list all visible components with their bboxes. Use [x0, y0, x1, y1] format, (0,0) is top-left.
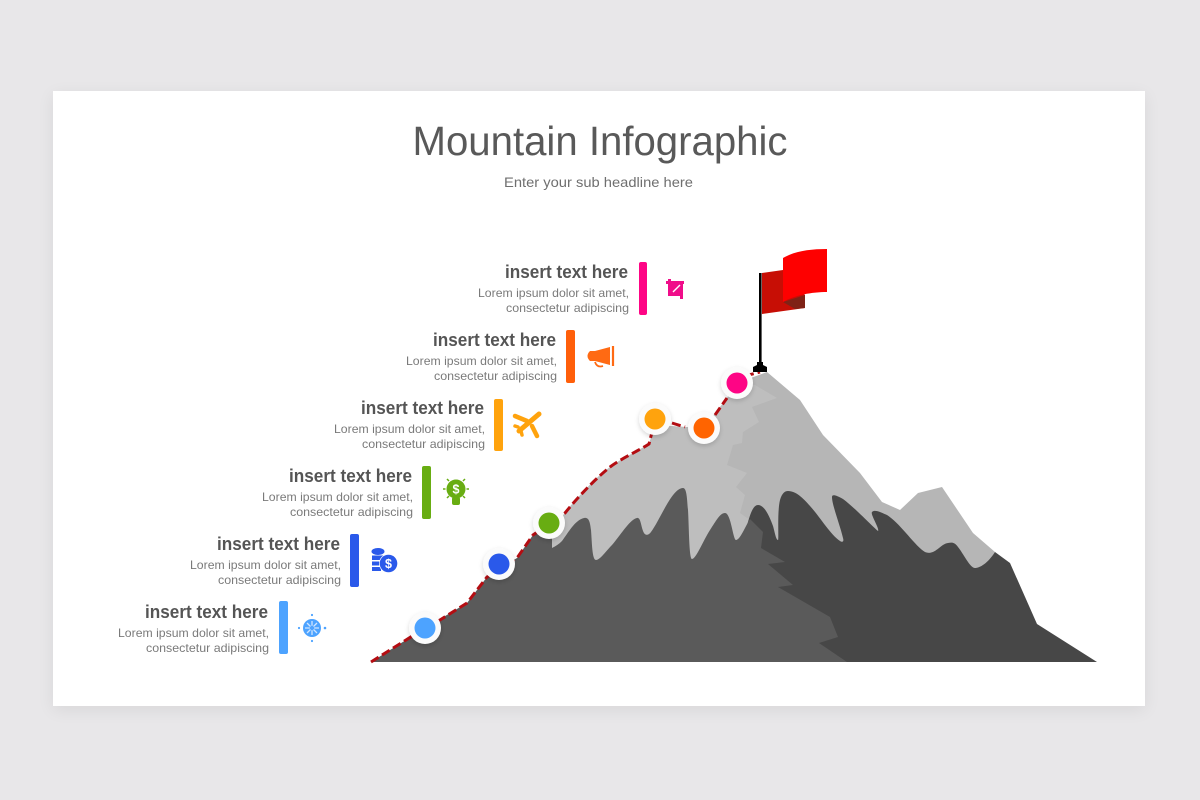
- subtitle: Enter your sub headline here: [504, 174, 693, 190]
- marker: amber: [639, 403, 671, 435]
- item 6: light blue: insert text here: [145, 602, 268, 622]
- item 1: pink: insert text here: [505, 262, 628, 282]
- item 4: green: [262, 466, 469, 519]
- item 5: blue: insert text here: [217, 534, 340, 554]
- icon: crop: [666, 279, 684, 299]
- item 4: green: consectetur adipiscing: [290, 505, 413, 519]
- icon: flag: [753, 249, 827, 372]
- item 2: orange: consectetur adipiscing: [434, 369, 557, 383]
- mountain: front dark face: [371, 488, 847, 662]
- item 3: amber: Lorem ipsum dolor sit amet,: [334, 422, 485, 436]
- item 6: light blue: consectetur adipiscing: [146, 641, 269, 655]
- mountain: dark right face: [700, 491, 1097, 662]
- item 2: orange: Lorem ipsum dolor sit amet,: [406, 354, 557, 368]
- item 5: blue: [190, 534, 398, 587]
- marker: pink: [721, 367, 753, 399]
- mountain illustration: [371, 372, 1097, 662]
- icon: idea bulb: $: [453, 482, 460, 496]
- marker: blue: [483, 548, 515, 580]
- item 4: green: Lorem ipsum dolor sit amet,: [262, 490, 413, 504]
- route: dashed climbing path: [371, 372, 760, 662]
- item 2: orange: [406, 330, 613, 383]
- marker: green: [533, 507, 565, 539]
- item 3: amber: consectetur adipiscing: [362, 437, 485, 451]
- marker: orange: [688, 412, 720, 444]
- item 1: pink: Lorem ipsum dolor sit amet,: [478, 286, 629, 300]
- icon: megaphone: [588, 346, 613, 366]
- item 2: orange: insert text here: [433, 330, 556, 350]
- item 1: pink: consectetur adipiscing: [506, 301, 629, 315]
- icon: ship wheel: [298, 614, 326, 642]
- icon: airplane: [515, 414, 539, 436]
- title: Mountain Infographic: [412, 118, 788, 164]
- item 3: amber: insert text here: [361, 398, 484, 418]
- mountain: lighter snow face: [545, 383, 777, 600]
- item 3: amber: [334, 398, 539, 451]
- item 5: blue: consectetur adipiscing: [218, 573, 341, 587]
- mountain: snow cap: [545, 372, 1000, 620]
- item 5: blue: Lorem ipsum dolor sit amet,: [190, 558, 341, 572]
- item 4: green: insert text here: [289, 466, 412, 486]
- icon: idea bulb: [443, 479, 469, 505]
- icon: coins: [372, 548, 398, 573]
- item 1: pink: [478, 262, 684, 315]
- item 6: light blue: [118, 601, 326, 655]
- panel: white card: [53, 91, 1145, 706]
- icon: coins: $: [385, 557, 392, 571]
- item 6: light blue: Lorem ipsum dolor sit amet,: [118, 626, 269, 640]
- marker: light blue: [409, 612, 441, 644]
